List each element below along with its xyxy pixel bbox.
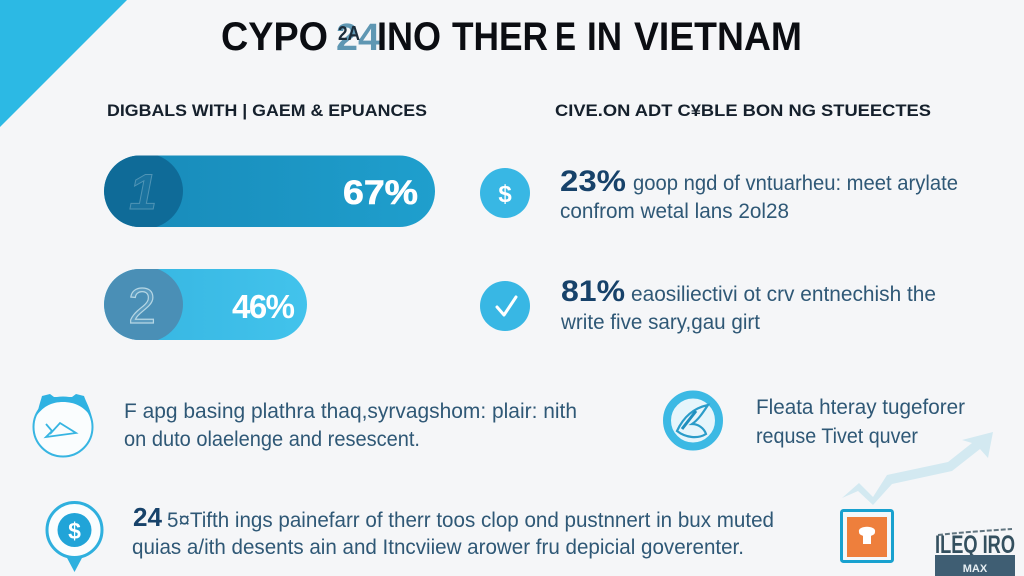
number 81%: 81% <box>561 275 625 308</box>
icon: bird badge <box>667 394 719 446</box>
icon: dollar <box>480 168 530 218</box>
stat 23% <box>480 165 958 223</box>
badge 2: 2 <box>128 278 156 334</box>
description: eaosiliectivi ot crv entnechish the <box>631 283 936 306</box>
title <box>221 15 802 59</box>
bar 1: 67% <box>104 153 435 229</box>
note: survey: requse Tivet quver <box>756 425 918 448</box>
left heading: DIGBALS WITH | GAEM & EPUANCES <box>107 101 427 120</box>
value 46%: 46% <box>232 288 295 325</box>
right heading: CIVE.ON ADT C¥BLE BON NG STUEECTES <box>555 101 931 120</box>
arrow: rising trend <box>842 432 993 505</box>
title: CYPO <box>221 15 328 59</box>
description: goop ngd of vntuarheu: meet arylate <box>633 172 958 195</box>
title: IN <box>587 15 622 59</box>
title: VIETNAM <box>634 15 802 59</box>
text: F apg basing plathra thaq,syrvagshom: plair: nith <box>124 400 577 423</box>
corner triangle <box>0 0 127 127</box>
icon: location pin: $ <box>68 518 81 544</box>
logo: MAX <box>963 563 988 575</box>
note: survey <box>667 394 965 448</box>
text: Fleata hteray tugeforer <box>756 396 965 419</box>
badge 1: 1 <box>129 164 157 220</box>
stat 81%: write five sary,gau girt <box>560 311 760 334</box>
note: 24: quias a/ith desents ain and Itncviiew arower fru depicial goverenter. <box>132 536 744 559</box>
logo <box>935 529 1015 576</box>
icon: orange box <box>842 510 892 562</box>
note: 24 <box>47 502 774 572</box>
text: 5¤Tifth ings painefarr of therr toos clop ond pustnnert in bux muted <box>167 509 774 532</box>
note: platform <box>34 394 577 456</box>
icon: location pin <box>47 502 102 572</box>
title: 24 <box>336 17 380 59</box>
value 67%: 67% <box>343 174 418 212</box>
icon: check <box>480 281 530 331</box>
title: 2A <box>338 23 360 45</box>
number 24: 24 <box>133 502 163 532</box>
icon: stopwatch <box>34 394 92 456</box>
badge 1 <box>104 153 183 229</box>
badge 2 <box>104 266 183 342</box>
stat 81% <box>480 275 936 334</box>
icon: dollar: $ <box>498 181 512 208</box>
logo band <box>935 555 1015 576</box>
bar 2: 46% <box>104 266 307 342</box>
number 23%: 23% <box>560 165 626 198</box>
stat 23%: confrom wetal lans 2ol28 <box>560 200 789 223</box>
note: platform: on duto olaelenge and resescent. <box>124 428 420 451</box>
title: INO <box>377 15 441 59</box>
title: THER <box>452 15 548 59</box>
title: E <box>555 15 576 59</box>
